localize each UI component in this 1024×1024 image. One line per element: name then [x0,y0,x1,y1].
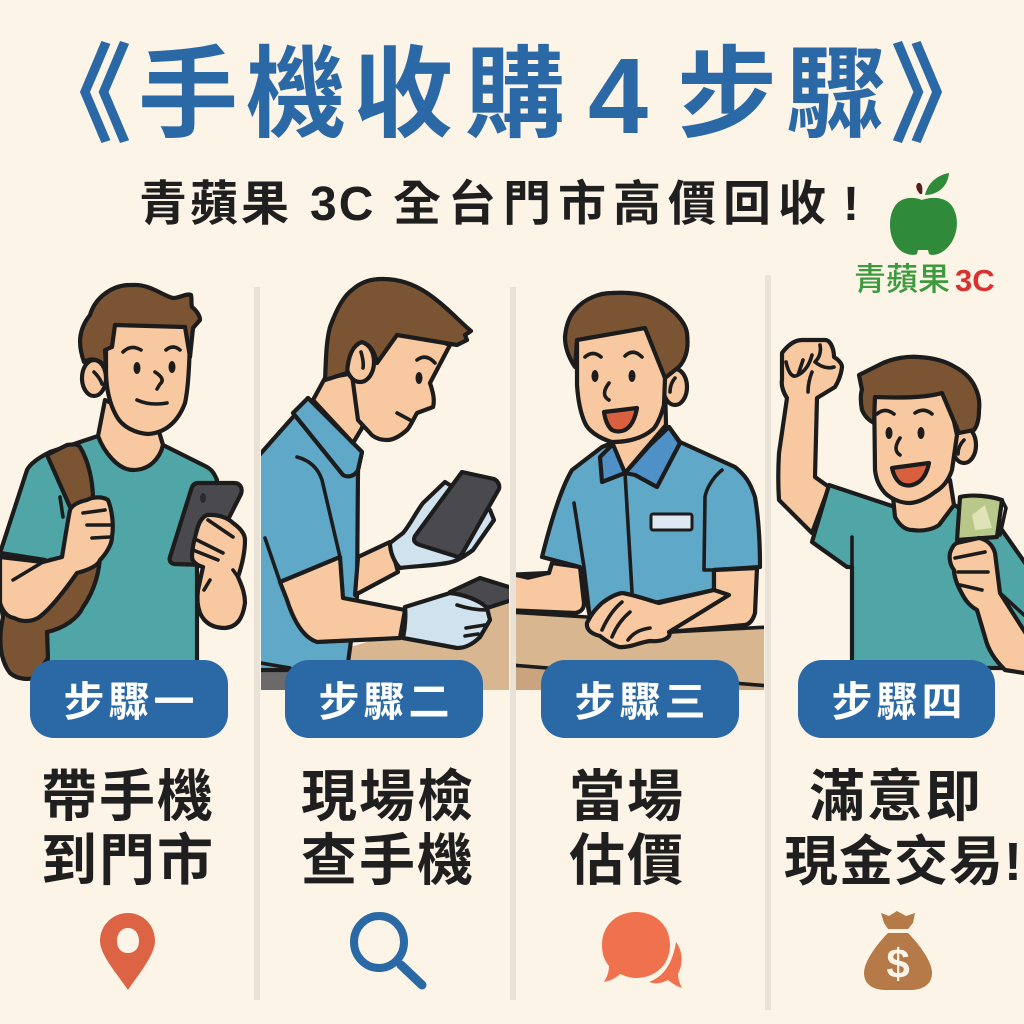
name badge [651,514,692,530]
badge: step 1: 步驟一 [64,679,198,725]
sleeve [265,457,340,582]
hands [587,590,729,647]
subtitle: 青蘋果 [139,178,292,231]
sleeve line [850,537,854,668]
badge: step 4: 步驟四 [832,679,966,725]
right hand finger lines [193,520,238,590]
icon: money bag [864,911,932,990]
panel: step 1 illustration [0,285,245,679]
finger lines [13,497,110,580]
upper arm [280,557,405,642]
badge: step 3: 步驟三 [574,679,710,725]
neck [98,400,163,470]
title: 機 [246,39,346,151]
subtitle: ! [843,178,859,231]
ear [82,360,106,396]
title: 《 [24,35,132,156]
lower glove [403,593,490,648]
upper glove [390,482,494,568]
badge: step 4 [798,660,995,738]
neck [312,375,364,445]
icon: money bag: $ [886,940,910,987]
label: step 1 [41,765,215,892]
badge: step 2 [285,660,483,738]
finger lines [516,575,652,642]
hair [565,293,688,378]
ear [346,342,374,382]
face details [358,352,435,433]
label: step 2 [301,765,475,892]
cash [957,496,1006,540]
panel: step 2 illustration [255,279,512,691]
collar [293,398,362,476]
subtitle [139,178,859,231]
label: step 4: 滿意即 [809,765,983,828]
face details [585,352,675,432]
neck [893,480,954,531]
title: 手 [138,39,238,151]
label: step 2: 查手機 [301,829,475,892]
ear [663,369,687,405]
logo wordmark [854,254,995,300]
logo wordmark: 青蘋果 [854,254,950,300]
subtitle: 3C [310,178,375,231]
glove lines [457,605,487,636]
icon: apple [890,173,957,255]
hem line [261,663,290,668]
hair [80,285,200,367]
subtitle: 全台門市高價回收 [393,178,833,231]
shirt [0,436,217,668]
fist lines [786,345,834,392]
face details [94,347,180,404]
label: step 3: 估價 [569,829,685,892]
upper phone [414,472,499,557]
title: 購 [465,39,565,151]
badge: step 3 [541,660,739,738]
hand and arm [950,538,1024,674]
strap [47,444,93,507]
icon: location pin [100,913,155,990]
title: 》 [890,35,998,156]
counter [516,612,764,690]
face details [877,410,964,486]
panel: step 4 illustration [778,340,1024,674]
counter [261,600,510,691]
label: step 2: 現場檢 [301,765,475,828]
label: step 3: 當場 [569,765,685,828]
badge: step 1 [30,660,228,738]
label: step 4 [784,765,1023,892]
title: 4 [588,35,648,156]
title [24,35,998,156]
phone [170,483,242,565]
left arm and hand [0,497,113,621]
face [577,325,665,442]
hair [325,279,471,380]
lower phone [450,578,512,608]
sleeve and placket [574,470,722,617]
backpack [0,553,100,679]
face [352,325,450,440]
title: 收 [353,39,453,151]
hair [859,357,979,433]
face [874,380,957,503]
badge: step 2: 步驟二 [318,679,454,725]
panel: step 3 illustration [505,293,770,695]
right forearm [659,568,757,632]
shirt [812,485,1024,668]
label: step 1: 到門市 [41,829,215,892]
left arm [505,563,584,613]
shirt [255,398,362,670]
raised arm [778,340,842,533]
finger lines [955,552,1024,615]
icon: speech bubbles [602,912,682,988]
label: step 1: 帶手機 [41,765,215,828]
title: 步 [677,39,777,151]
right hand [192,515,245,628]
collar [600,427,680,487]
logo wordmark: 3C [955,263,995,298]
neck [612,385,666,473]
forearm upper [355,542,398,595]
logo: green apple brand [854,173,995,300]
face [106,320,190,434]
shirt [542,427,760,617]
ear [952,427,976,463]
title: 驟 [786,39,886,151]
label: step 3 [569,765,685,892]
icon: magnifier [354,916,422,985]
label: step 4: 現金交易! [784,832,1023,892]
